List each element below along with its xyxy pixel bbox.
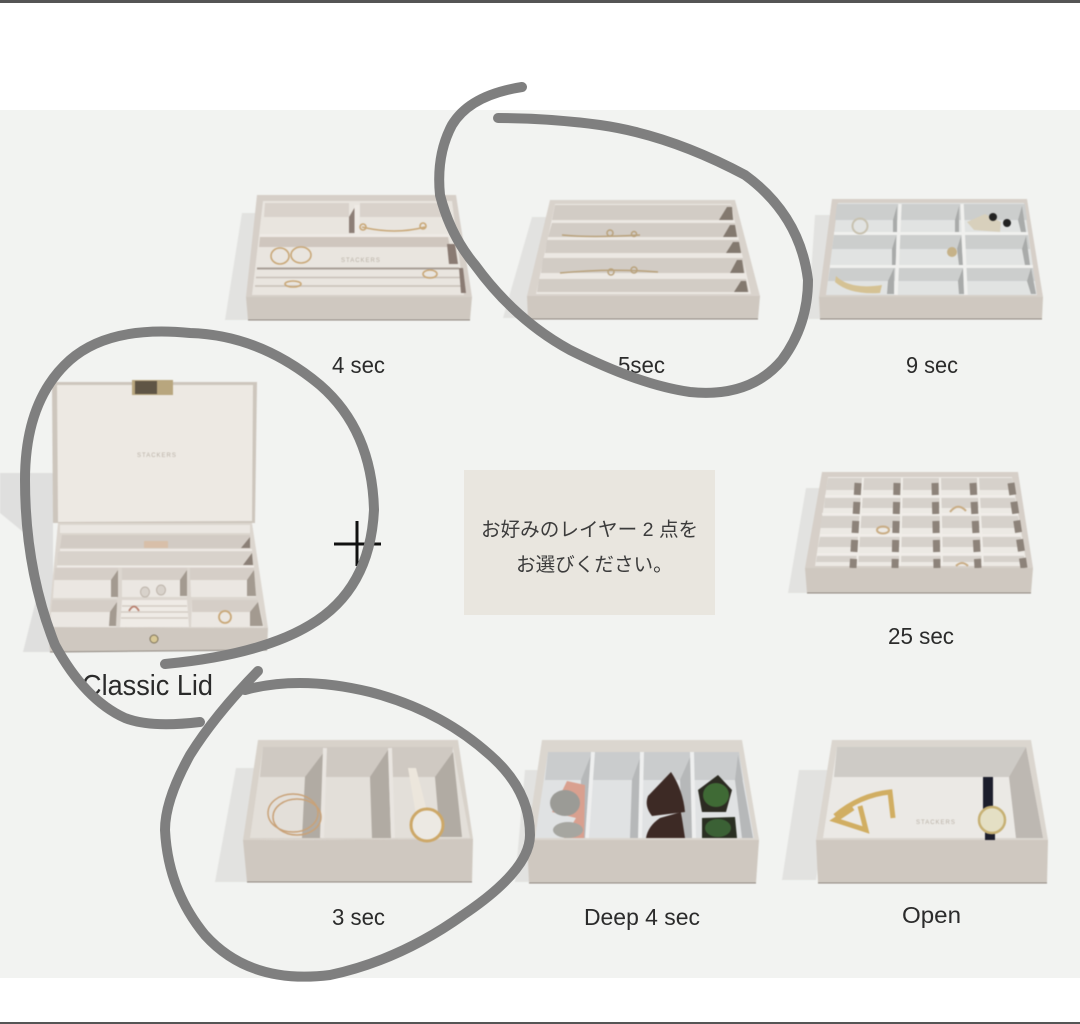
label: 5sec: 5sec — [618, 352, 665, 378]
icon: rings — [129, 606, 231, 623]
icon: green sunglasses — [698, 775, 737, 838]
icon: jewellery on 9 sec tray — [835, 213, 1011, 293]
lid shadow — [0, 473, 53, 652]
icon: bracelet — [268, 794, 321, 835]
tray: 3 sec — [215, 740, 473, 882]
icon: jewellery on 25 sec tray — [877, 507, 968, 566]
label: 4 sec: 4 sec — [332, 352, 385, 378]
annotation: hand-drawn circle around 5 sec — [439, 87, 808, 393]
annotation: hand-drawn circle around Classic Lid — [25, 332, 374, 724]
icon: jewellery on 4 sec tray — [271, 223, 437, 287]
icon: jewellery on 5 sec tray — [560, 230, 658, 275]
callout: choose two layers — [464, 470, 715, 615]
label: Open: Open — [902, 902, 961, 928]
label: Deep 4 sec: Deep 4 sec — [584, 904, 700, 930]
label: 25 sec: 25 sec — [888, 623, 954, 649]
lid — [52, 382, 257, 523]
icon: clasp — [132, 380, 173, 395]
base — [48, 523, 268, 628]
icon: black watch — [979, 777, 1005, 840]
icon: pink sunglasses — [550, 781, 585, 838]
icon: tortoiseshell sunglasses — [646, 772, 685, 838]
icon: earrings — [140, 585, 166, 597]
label: Classic Lid: Classic Lid — [82, 670, 213, 702]
tray: Open — [782, 740, 1048, 883]
tray: Open: STACKERS — [916, 820, 956, 826]
label: 9 sec: 9 sec — [906, 352, 958, 378]
icon: button — [150, 635, 158, 643]
callout: choose two layers: お選びください。 — [516, 554, 673, 576]
label: 3 sec: 3 sec — [332, 904, 385, 930]
annotation: hand-drawn circle around 3 sec — [165, 671, 530, 977]
tray: 5 sec — [503, 200, 760, 319]
panel: classic lid box — [0, 380, 268, 652]
tray: 9 sec — [808, 199, 1043, 319]
callout: choose two layers: お好みのレイヤー 2 点を — [481, 519, 698, 541]
panel: classic lid box: STACKERS — [137, 453, 177, 459]
tray: 4 sec: STACKERS — [341, 258, 381, 264]
tray: Deep 4 sec — [515, 740, 759, 883]
icon: plus sign — [334, 521, 381, 566]
icon: gold cuff — [835, 792, 893, 830]
icon: watch — [408, 768, 443, 841]
tray: 25 sec — [788, 472, 1033, 593]
tray: 4 sec — [225, 195, 472, 320]
